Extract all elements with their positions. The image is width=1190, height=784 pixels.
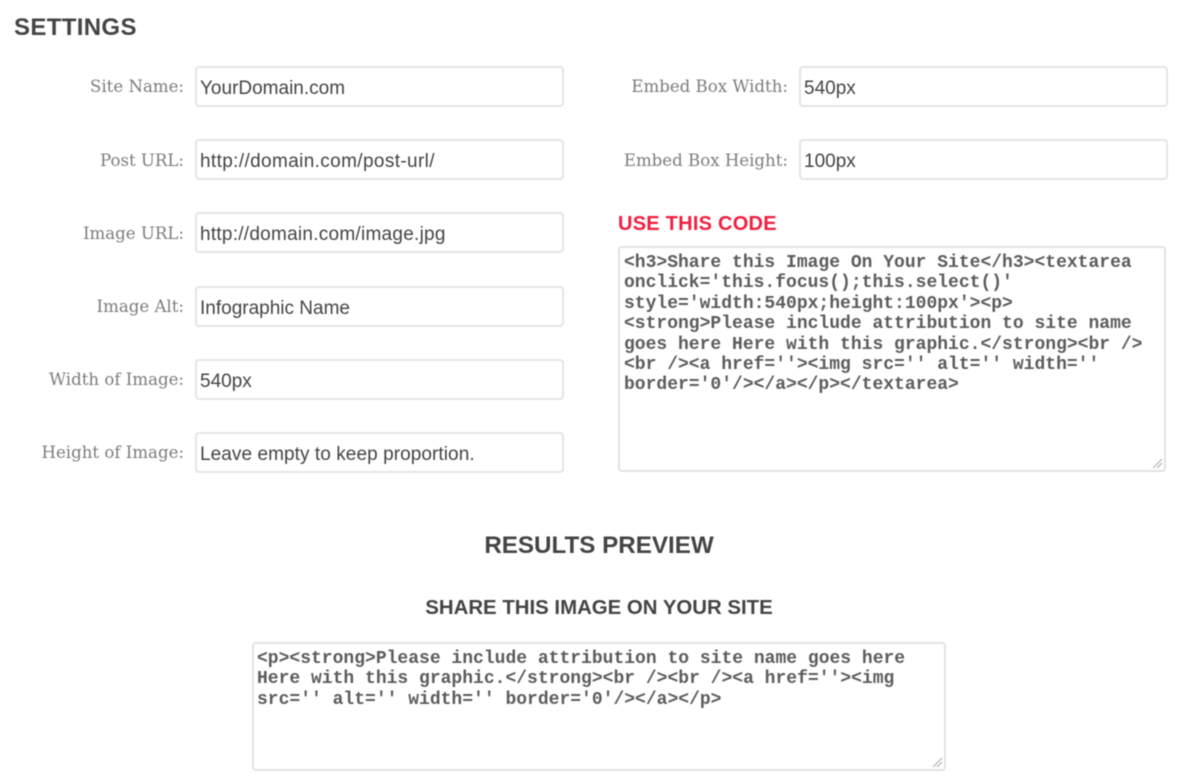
label: image alt: Image Alt: <box>97 297 184 316</box>
field: embed box height: 100px <box>804 151 856 172</box>
label: height of image: Height of Image: <box>42 443 184 462</box>
field: embed box height <box>799 139 1168 180</box>
field: image url: http://domain.com/image.jpg <box>200 224 446 245</box>
code box: embed code <box>618 246 1166 472</box>
field: embed box width <box>799 66 1168 107</box>
heading: settings: SETTINGS <box>14 14 137 41</box>
field: image url <box>195 212 564 253</box>
heading: results preview: RESULTS PREVIEW <box>484 532 714 559</box>
code box: results preview <box>252 642 946 771</box>
code box: results preview: <p><strong>Please include attribution to site name goes here Here with this graphic.</strong><br /><br /><a href=''><img src='' alt='' width='' border='0'/></a></p> <box>257 649 905 710</box>
field: post url <box>195 139 564 180</box>
field: height of image <box>195 432 564 473</box>
heading: share this image on your site: SHARE THIS IMAGE ON YOUR SITE <box>425 597 773 619</box>
code box: embed code: <h3>Share this Image On Your Site</h3><textarea onclick='this.focus();this.select()' style='width:540px;height:100px'><p> <strong>Please include attribution to site name goes here Here with this graphic.</strong><br /> <br /><a href=''><img src='' alt='' width='' border='0'/></a></p></textarea> <box>624 253 1142 395</box>
label: embed box width: Embed Box Width: <box>631 77 788 96</box>
field: width of image: 540px <box>200 371 252 392</box>
field: embed box width: 540px <box>804 78 856 99</box>
label: width of image: Width of Image: <box>49 370 184 389</box>
label: embed box height: Embed Box Height: <box>624 151 788 170</box>
label: image url: Image URL: <box>83 224 184 243</box>
field: image alt: Infographic Name <box>200 298 350 319</box>
field: site name: YourDomain.com <box>200 78 345 99</box>
field: site name <box>195 66 564 107</box>
heading: use this code: USE THIS CODE <box>618 213 777 235</box>
field: height of image: Leave empty to keep proportion. <box>200 444 475 465</box>
label: site name: Site Name: <box>90 77 184 96</box>
field: post url: http://domain.com/post-url/ <box>200 151 435 172</box>
field: width of image <box>195 359 564 400</box>
label: post url: Post URL: <box>100 151 184 170</box>
field: image alt <box>195 286 564 327</box>
